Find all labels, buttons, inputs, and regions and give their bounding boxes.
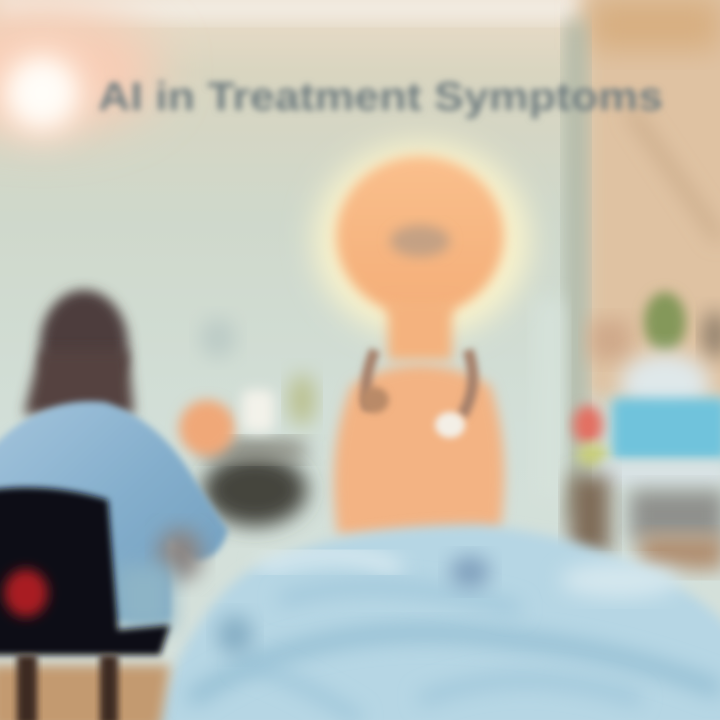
glowing lamp bbox=[0, 49, 86, 137]
blanket bbox=[150, 525, 720, 720]
seated doctor bbox=[0, 290, 228, 630]
bedside table with items bbox=[179, 318, 315, 526]
glowing patient figure bbox=[314, 142, 530, 535]
right shelf with supplies bbox=[570, 292, 720, 570]
blurred title: AI in Treatment Symptoms bbox=[98, 75, 663, 119]
wooden panel right bbox=[535, 0, 720, 520]
black office chair bbox=[0, 488, 170, 720]
